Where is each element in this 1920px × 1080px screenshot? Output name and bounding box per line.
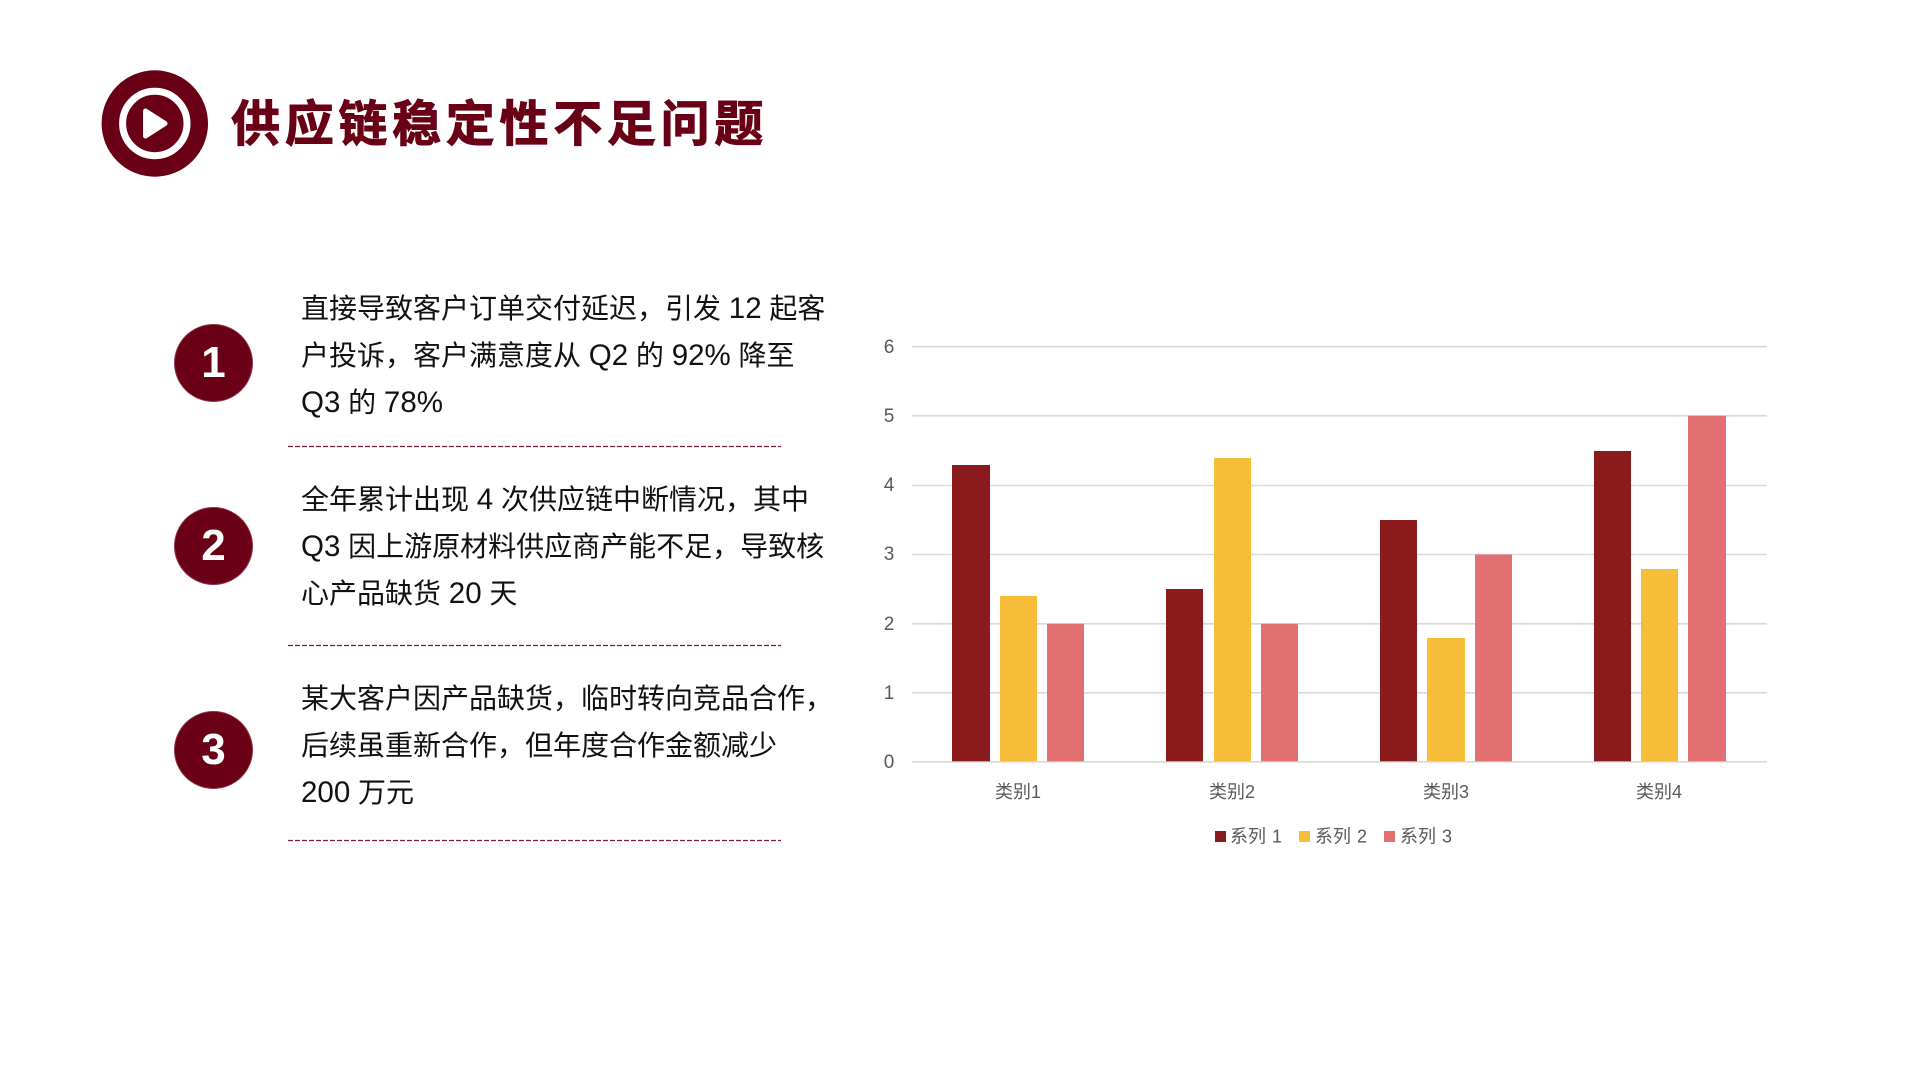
text block 2: Q3 因上游原材料供应商产能不足，导致核 [301, 530, 824, 563]
text block 3 [301, 683, 833, 809]
text block 2: 心产品缺货 20 天 [301, 577, 517, 610]
y axis labels: 6 [884, 337, 894, 358]
text block 1: Q3 的 78% [301, 386, 443, 419]
text block 1 [301, 292, 825, 419]
text block 3: 某大客户因产品缺货，临时转向竞品合作， [301, 683, 833, 714]
number badge 3 [174, 711, 253, 789]
category labels: 类别1 [995, 782, 1041, 802]
legend: 系列 3 [1400, 826, 1452, 846]
text block 2 [301, 483, 824, 610]
y axis labels: 0 [884, 752, 894, 773]
text block 1: 直接导致客户订单交付延迟，引发 12 起客 [301, 292, 825, 325]
series 1 bars [952, 451, 1631, 761]
y axis labels: 4 [884, 475, 895, 496]
legend [1215, 826, 1452, 846]
y axis labels: 3 [884, 544, 894, 565]
title: 供应链稳定性不足问题 [231, 85, 768, 156]
category labels: 类别3 [1423, 782, 1469, 802]
number badge 3: 3 [201, 725, 226, 774]
text block 2: 全年累计出现 4 次供应链中断情况，其中 [301, 483, 809, 516]
y axis labels: 5 [884, 406, 894, 427]
bar chart [884, 337, 1767, 846]
category labels: 类别4 [1636, 782, 1682, 802]
icon: play button badge [102, 70, 208, 177]
number badge 2: 2 [201, 521, 226, 570]
category labels: 类别2 [1209, 782, 1255, 802]
text block 3: 后续虽重新合作，但年度合作金额减少 [301, 730, 777, 761]
text block 1: 户投诉，客户满意度从 Q2 的 92% 降至 [301, 339, 795, 372]
y axis labels: 2 [884, 614, 894, 635]
number badge 2 [174, 507, 253, 585]
category labels [995, 782, 1682, 802]
number badge 1: 1 [201, 338, 226, 387]
y axis labels [884, 337, 895, 773]
text block 3: 200 万元 [301, 776, 414, 809]
number badge 1 [174, 324, 253, 402]
series 3 bars [1047, 416, 1726, 761]
legend: 系列 2 [1315, 826, 1367, 846]
legend: 系列 1 [1230, 826, 1282, 846]
series 2 bars [1000, 458, 1678, 761]
y axis labels: 1 [884, 683, 894, 704]
